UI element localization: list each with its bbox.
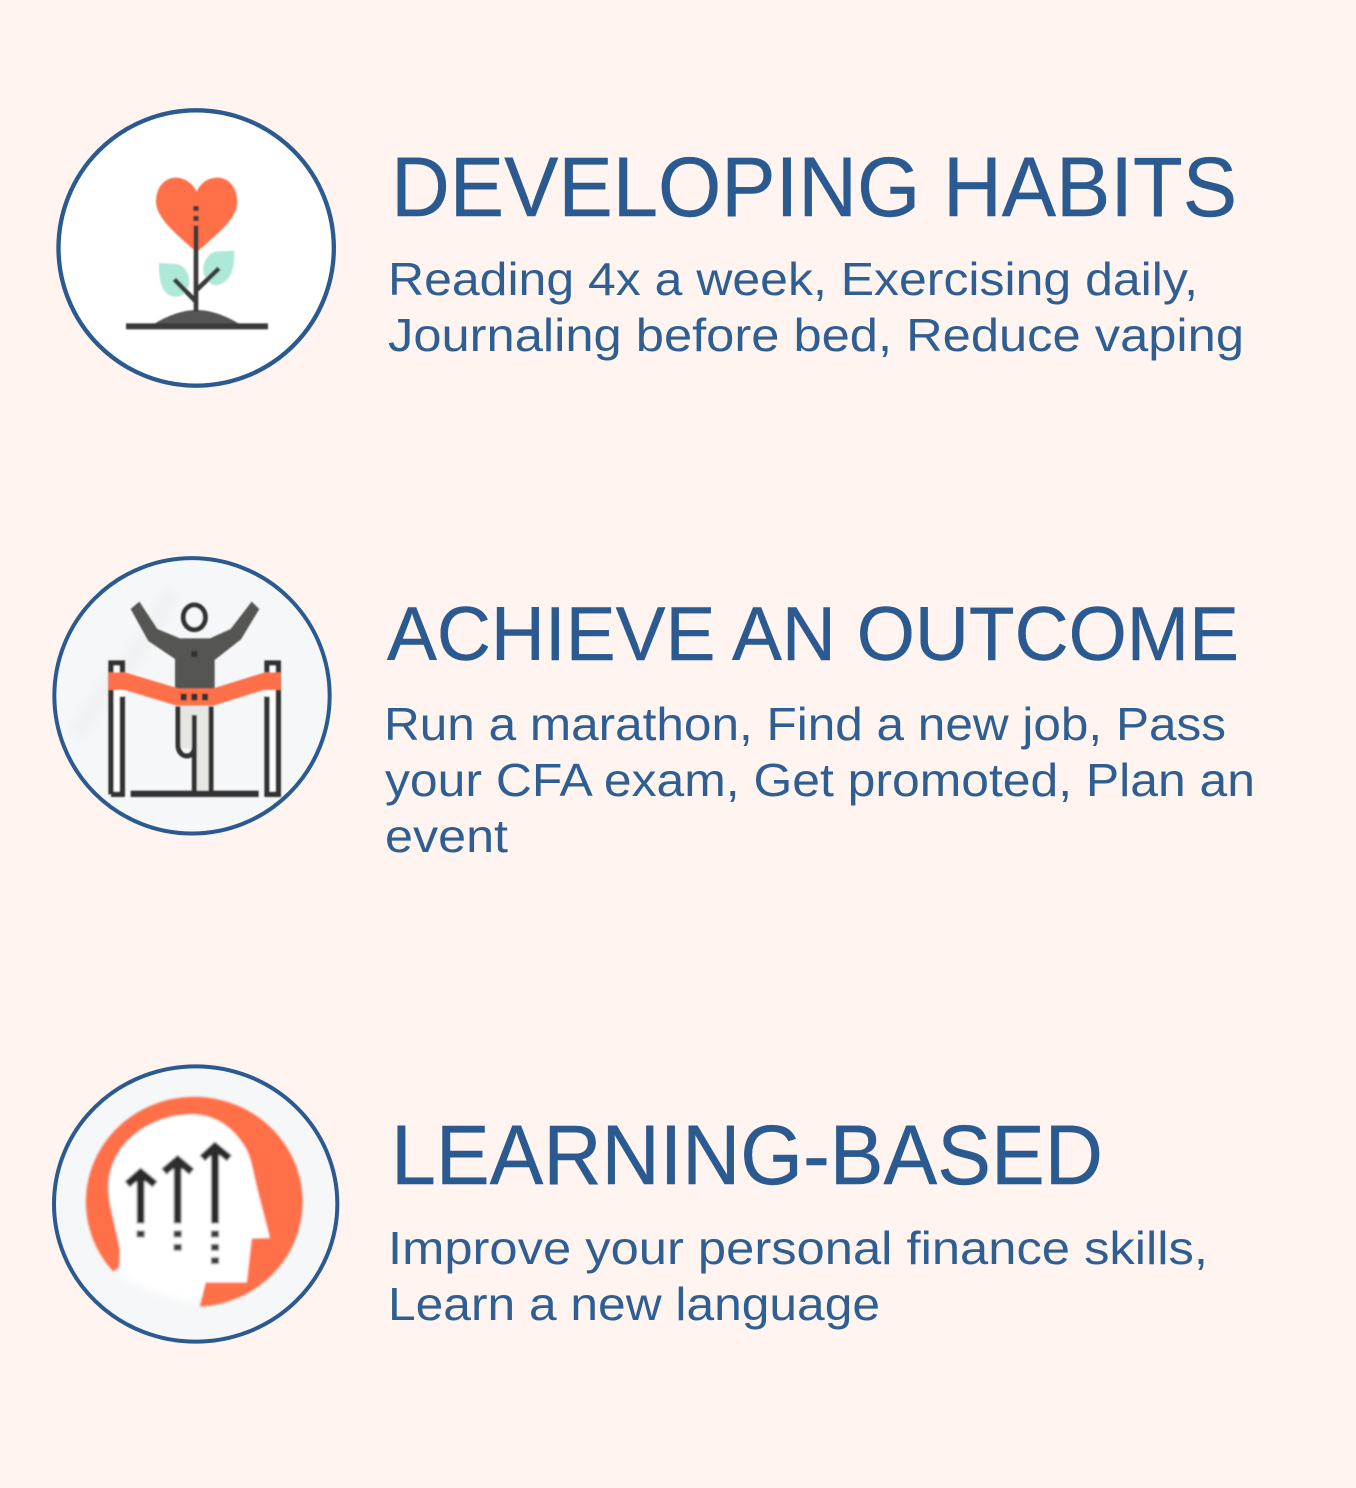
text: learning-based examples bbox=[388, 1222, 1208, 1330]
text: developing habits examples bbox=[388, 253, 1244, 361]
text: learning-based examples: Learn a new language bbox=[388, 1278, 880, 1330]
heading: achieve an outcome: ACHIEVE AN OUTCOME bbox=[387, 592, 1239, 677]
text: achieve an outcome examples: your CFA exam, Get promoted, Plan an bbox=[385, 754, 1255, 806]
text: achieve an outcome examples: event bbox=[385, 810, 508, 862]
icon: heart plant in circle bbox=[58, 110, 334, 386]
text: learning-based examples: Improve your personal finance skills, bbox=[388, 1222, 1208, 1274]
text: achieve an outcome examples bbox=[384, 698, 1255, 862]
heading: developing habits: DEVELOPING HABITS bbox=[391, 140, 1237, 234]
icon: head with upward arrows in circle bbox=[54, 1066, 337, 1342]
icon: runner crossing finish line in circle bbox=[54, 558, 330, 833]
text: developing habits examples: Reading 4x a week, Exercising daily, bbox=[388, 253, 1198, 305]
panel: achieve an outcome bbox=[54, 558, 1255, 862]
text: developing habits examples: Journaling before bed, Reduce vaping bbox=[388, 309, 1244, 361]
heading: learning-based: LEARNING-BASED bbox=[391, 1108, 1103, 1202]
panel: developing habits bbox=[58, 110, 1244, 386]
panel: learning-based bbox=[54, 1066, 1208, 1342]
text: achieve an outcome examples: Run a marathon, Find a new job, Pass bbox=[384, 698, 1226, 750]
